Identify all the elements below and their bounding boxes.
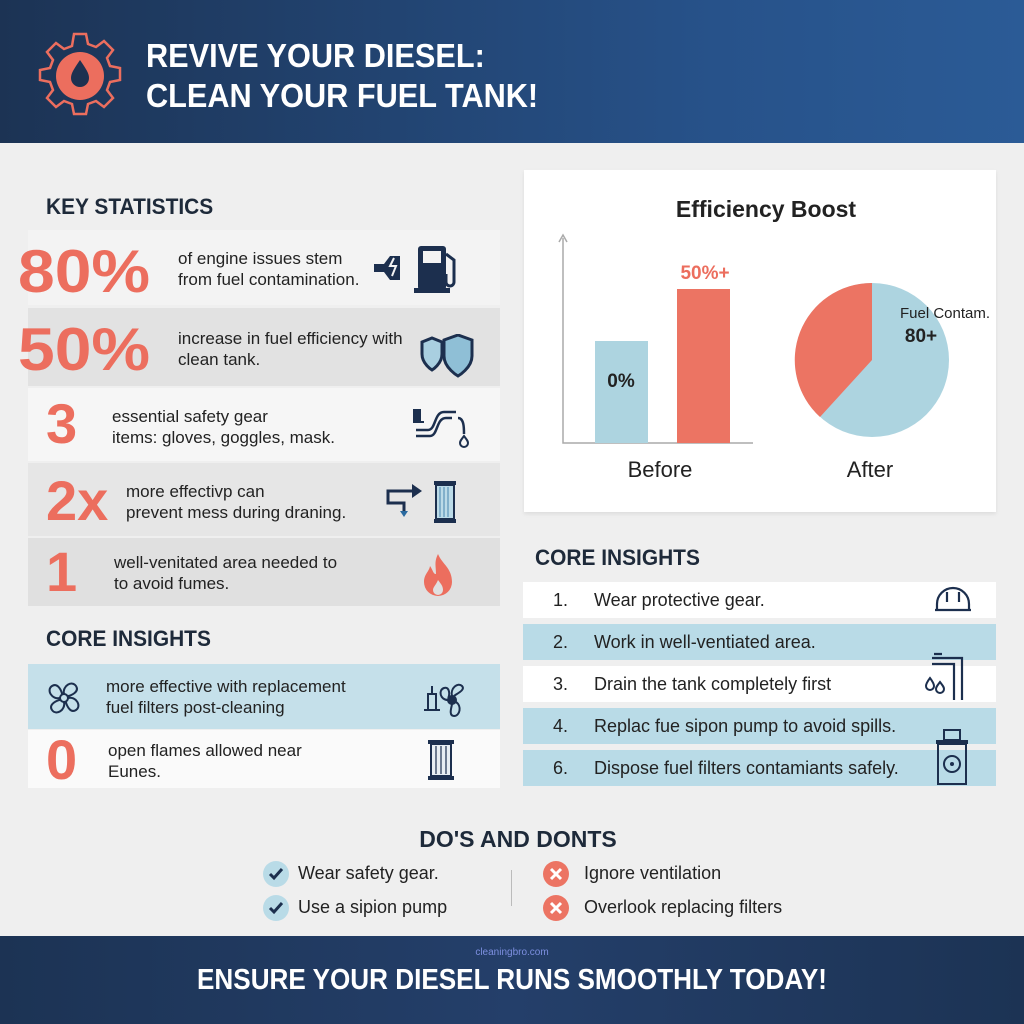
- pie chart: 80+: [905, 326, 937, 347]
- icon: hose: [413, 409, 469, 448]
- list rows right: 6.: [553, 758, 568, 778]
- stat row 50%: increase in fuel efficiency with: [178, 329, 403, 348]
- list rows right: Replac fue sipon pump to avoid spills.: [594, 716, 896, 736]
- heading: dos and donts: DO'S AND DONTS: [419, 826, 617, 852]
- title: [146, 37, 538, 114]
- insight row 0: open flames allowed near: [108, 741, 302, 760]
- list rows right: 4.: [553, 716, 568, 736]
- donts list: Overlook replacing filters: [584, 897, 782, 917]
- icon: fan filter: [424, 684, 464, 717]
- list rows right: [523, 582, 996, 786]
- insight row fan: more effective with replacement: [106, 677, 346, 696]
- icon: filter: [428, 740, 454, 780]
- list rows right: Dispose fuel filters contamiants safely.: [594, 758, 899, 778]
- stat row 50%: 50%: [18, 316, 150, 383]
- chart title: Efficiency Boost: [676, 196, 856, 222]
- list rows right: Drain the tank completely first: [594, 674, 831, 694]
- stat row 50%: [28, 308, 500, 386]
- stat row 50%: clean tank.: [178, 350, 260, 369]
- pie chart: [794, 283, 990, 482]
- footer text: ENSURE YOUR DIESEL RUNS SMOOTHLY TODAY!: [197, 964, 827, 996]
- icon: tap and drops: [925, 652, 964, 700]
- icon: shields: [420, 334, 474, 378]
- stat row 80%: from fuel contamination.: [178, 270, 359, 289]
- stat row 1: [28, 538, 500, 606]
- stat row 3: items: gloves, goggles, mask.: [112, 428, 335, 447]
- stat row 1: well-venitated area needed to: [114, 553, 337, 572]
- donts list: Ignore ventilation: [584, 863, 721, 883]
- footer source: cleaningbro.com: [475, 947, 549, 958]
- donts list: [543, 861, 782, 921]
- icon: hard hat: [935, 586, 971, 612]
- list rows right: 3.: [553, 674, 568, 694]
- pie chart: Fuel Contam.: [900, 305, 990, 322]
- bar chart: 50%+: [680, 263, 730, 284]
- icon: flame: [424, 554, 452, 596]
- icon: fan: [48, 682, 80, 714]
- bar chart: 0%: [607, 371, 635, 392]
- stat row 3: 3: [46, 392, 77, 455]
- chart panel: efficiency boost: [524, 170, 996, 512]
- list rows right: Wear protective gear.: [594, 590, 765, 610]
- stat row 2x: more effectivp can: [126, 482, 265, 501]
- dos list: Wear safety gear.: [298, 863, 439, 883]
- heading: core insights left: CORE INSIGHTS: [46, 626, 211, 651]
- bar chart: Before: [628, 457, 692, 482]
- pie chart: After: [847, 457, 893, 482]
- insight row fan: [28, 664, 500, 729]
- heading: core insights right: CORE INSIGHTS: [535, 545, 700, 570]
- insight row 0: [28, 730, 500, 788]
- insight row 0: Eunes.: [108, 762, 161, 781]
- footer banner: [0, 936, 1024, 1024]
- title: CLEAN YOUR FUEL TANK!: [146, 77, 538, 114]
- stat row 1: to avoid fumes.: [114, 574, 229, 593]
- icon: engine and pump: [374, 246, 456, 293]
- list rows right: 1.: [553, 590, 568, 610]
- list rows right: Work in well-ventiated area.: [594, 632, 816, 652]
- stat row 2x: 2x: [46, 469, 108, 532]
- insight row fan: fuel filters post-cleaning: [106, 698, 285, 717]
- stat row 80%: of engine issues stem: [178, 249, 342, 268]
- header banner: [0, 0, 1024, 143]
- stat row 80%: 80%: [18, 238, 150, 305]
- icon: arrow and filter: [386, 481, 456, 523]
- stat row 2x: [28, 463, 500, 536]
- dos list: [263, 861, 447, 921]
- stat row 3: essential safety gear: [112, 407, 268, 426]
- heading: key statistics: KEY STATISTICS: [46, 194, 213, 219]
- stat row 3: [28, 388, 500, 461]
- stat row 2x: prevent mess during draning.: [126, 503, 346, 522]
- stat row 80%: [28, 230, 500, 305]
- icon: hazard can: [936, 729, 968, 785]
- title: REVIVE YOUR DIESEL:: [146, 37, 485, 74]
- stat row 1: 1: [46, 540, 77, 603]
- dos list: Use a sipion pump: [298, 897, 447, 917]
- bar chart: [558, 234, 753, 482]
- insight row 0: 0: [46, 728, 77, 791]
- icon: gear with drop: [38, 32, 122, 116]
- list rows right: 2.: [553, 632, 568, 652]
